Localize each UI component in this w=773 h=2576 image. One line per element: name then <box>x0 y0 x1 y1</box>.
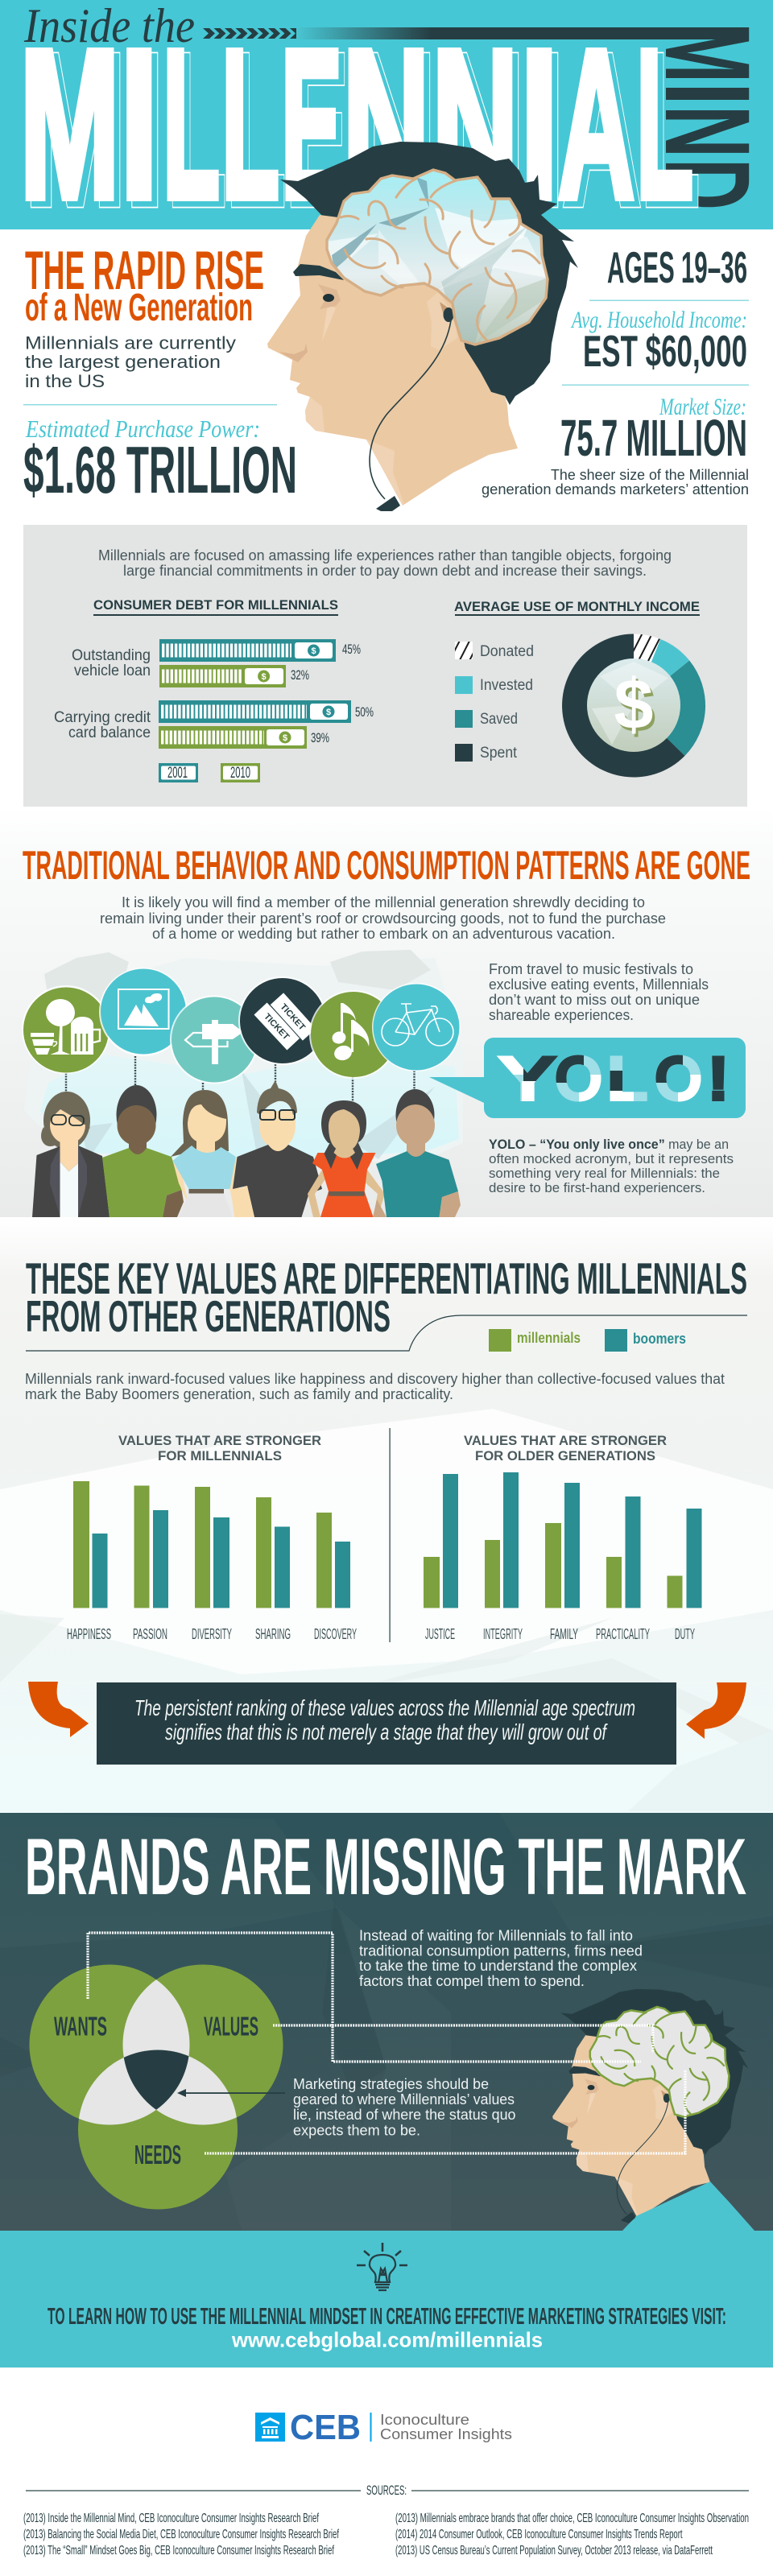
bar chart: values stronger for older generations: JUSTICE <box>425 1626 455 1642</box>
bar chart: values stronger for older generations <box>424 1472 702 1642</box>
sources left column: (2013) Balancing the Social Media Diet, CEB Iconoculture Consumer Insights Research Brief <box>23 2528 339 2541</box>
callout: YOLO speech bubble: L <box>607 1046 647 1112</box>
text: marketing strategies <box>293 2076 515 2138</box>
title outline shadow: L <box>227 11 285 248</box>
title outline shadow: N <box>348 11 435 248</box>
callout: YOLO speech bubble: L <box>607 1046 647 1112</box>
logo: CEB Iconoculture: Iconoculture <box>380 2412 469 2428</box>
icon: bicycle <box>372 983 461 1071</box>
title: MIND rotated: N <box>640 105 773 158</box>
title outline shadow: A <box>564 11 640 248</box>
legend: millennials and boomers <box>489 1329 686 1352</box>
title outline shadow: L <box>168 11 225 248</box>
bar labels: card balance <box>68 724 151 741</box>
title outline shadow: I <box>126 11 164 248</box>
stat: household income <box>571 307 747 376</box>
title: MILLENNIAL: M <box>20 6 120 242</box>
panel: title header band <box>0 0 773 248</box>
bar: vehicle loan 2010: 32% <box>291 667 309 683</box>
text: YOLO definition <box>489 1137 734 1195</box>
bar labels: Carrying credit <box>54 709 151 726</box>
callout: YOLO speech bubble: L <box>607 1046 647 1112</box>
text: largest generation: the largest generation <box>25 352 221 372</box>
title: MILLENNIAL: E <box>281 6 342 242</box>
text: marketing strategies: lie, instead of where the status quo <box>293 2107 515 2123</box>
dotted connectors <box>88 1933 685 2153</box>
text: YOLO definition: desire to be first-hand experiencers. <box>489 1180 705 1195</box>
bar chart: values stronger for millennials: SHARING <box>255 1626 291 1642</box>
callout: YOLO speech bubble <box>429 1038 746 1118</box>
callout: YOLO speech bubble: O <box>655 1046 701 1112</box>
icon: picture frame <box>99 968 188 1056</box>
arrow: left orange <box>28 1682 89 1737</box>
stat: purchase power: $1.68 TRILLION <box>23 432 297 507</box>
bar chart: values stronger for millennials: DISCOVERY <box>314 1626 357 1642</box>
heading: key values: FROM OTHER GENERATIONS <box>26 1291 391 1341</box>
legend: monthly income: Spent <box>480 745 518 762</box>
sources left column: (2013) Inside the Millennial Mind, CEB Iconoculture Consumer Insights Research Brief <box>23 2512 319 2525</box>
icon: food and drink <box>22 985 110 1074</box>
callout: YOLO speech bubble: O <box>556 1046 601 1112</box>
text: instead of waiting: Instead of waiting for Millennials to fall into <box>359 1927 633 1943</box>
stat: market size: The sheer size of the Millennial <box>551 467 749 483</box>
title outline shadow: E <box>287 11 348 248</box>
arrow: right orange <box>686 1682 746 1739</box>
person: woman in blue top <box>171 1090 242 1217</box>
bar: credit card 2010 <box>159 726 329 749</box>
bar chart: values stronger for older generations: INTEGRITY <box>483 1626 523 1642</box>
bar chart: values stronger for millennials: PASSION <box>133 1626 167 1642</box>
intro paragraph: It is likely you will find a member of the millennial generation shrewdly deciding to <box>122 894 645 910</box>
bar: credit card 2010: $ <box>283 733 287 743</box>
legend: monthly income <box>455 642 534 762</box>
shirt <box>622 2182 754 2231</box>
stat: market size <box>482 394 749 497</box>
heading: stronger for older generations <box>464 1433 667 1463</box>
title outline shadow: I <box>526 11 564 248</box>
sources left column <box>23 2512 339 2557</box>
callout: YOLO speech bubble: Y <box>501 1046 554 1112</box>
title outline shadow <box>26 11 699 248</box>
person: man in black shirt with glasses <box>231 1080 322 1217</box>
stat: purchase power: Estimated Purchase Power: <box>25 415 260 443</box>
title: MILLENNIAL: I <box>120 6 158 242</box>
callout: YOLO speech bubble: Y <box>501 1046 554 1112</box>
sources <box>23 2483 749 2557</box>
title outline shadow: M <box>26 11 126 248</box>
text: marketing strategies: Marketing strategies should be <box>293 2076 489 2092</box>
title: MILLENNIAL: A <box>558 6 635 242</box>
venn labels: WANTS <box>54 2011 107 2041</box>
person: woman in orange dress <box>308 1100 385 1217</box>
callout: YOLO speech bubble: O <box>556 1046 601 1112</box>
heading: monthly income: AVERAGE USE OF MONTHLY INCOME <box>454 599 700 614</box>
intro text <box>98 547 672 579</box>
text: YOLO definition: something very real for Millennials: the <box>489 1166 720 1181</box>
title: Inside the: Inside the <box>23 0 195 52</box>
panel: title header band: L <box>642 11 699 248</box>
text: url: www.cebglobal.com/millennials <box>231 2328 543 2352</box>
illustration: head profile with brain <box>267 142 578 511</box>
bar chart: values stronger for millennials: HAPPINESS <box>67 1626 111 1642</box>
bar labels <box>54 647 151 741</box>
icon: dollar sign: $ <box>617 667 655 747</box>
heading: consumer debt: CONSUMER DEBT FOR MILLENNIALS <box>93 597 338 613</box>
callout: YOLO speech bubble: Y <box>501 1046 554 1112</box>
icon: music notes <box>309 990 398 1079</box>
venn labels: NEEDS <box>134 2140 181 2169</box>
paragraph: inward focused values <box>25 1371 725 1402</box>
title: MILLENNIAL: I <box>520 6 559 242</box>
callout: YOLO speech bubble: O <box>655 1046 701 1112</box>
panel: title header band: L <box>642 11 699 248</box>
title outline shadow: L <box>168 11 225 248</box>
background facets <box>24 950 463 1167</box>
bar: credit card 2001: $ <box>326 708 331 717</box>
title outline shadow: N <box>438 11 523 248</box>
bar labels: Outstanding <box>72 647 151 664</box>
venn labels <box>54 2011 258 2169</box>
title outline shadow: I <box>126 11 164 248</box>
divider line left <box>23 404 277 406</box>
bar: vehicle loan 2001 <box>159 639 361 662</box>
callout: YOLO speech bubble: O <box>556 1046 601 1112</box>
callout: YOLO speech bubble: ! <box>709 1046 728 1112</box>
logo: CEB Iconoculture: CEB <box>290 2408 361 2447</box>
title: MILLENNIAL: N <box>343 6 430 242</box>
intro paragraph: remain living under their parent’s roof or crowdsourcing goods, not to fund the purchase <box>100 910 666 927</box>
background facets <box>0 1409 773 1811</box>
person: man in green shirt <box>102 1085 184 1217</box>
title outline shadow: A <box>564 11 640 248</box>
callout: persistent ranking <box>97 1682 676 1765</box>
headline: the rapid rise <box>25 240 264 329</box>
title: MIND rotated: I <box>640 82 773 105</box>
paragraph: inward focused values: Millennials rank inward-focused values like happiness and discovery higher than collective-focused values that <box>25 1371 725 1387</box>
illustration: small head with brain <box>552 1989 754 2231</box>
bar: vehicle loan 2001: 45% <box>342 642 361 657</box>
title: MILLENNIAL: N <box>432 6 519 242</box>
bar: credit card 2001 <box>159 700 374 723</box>
venn diagram <box>29 1964 283 2209</box>
intro text: Millennials are focused on amassing life experiences rather than tangible objects, forgoing <box>98 547 672 564</box>
heading: stronger for older generations: VALUES THAT ARE STRONGER <box>464 1433 667 1448</box>
heading: stronger for older generations: FOR OLDER GENERATIONS <box>475 1448 655 1463</box>
title: MIND rotated: D <box>640 159 773 210</box>
icon: dollar sign: $ <box>614 664 653 744</box>
bar labels: vehicle loan <box>74 663 151 679</box>
text: largest generation: in the US <box>25 371 105 391</box>
icon: signpost <box>170 995 258 1084</box>
legend: monthly income: Saved <box>480 711 518 728</box>
person: woman with glasses and blazer <box>32 1092 110 1217</box>
logo: CEB Iconoculture <box>255 2408 512 2447</box>
intro paragraph <box>100 894 666 942</box>
text: largest generation: Millennials are currently <box>25 333 236 353</box>
stat: market size: generation demands marketers’ attention <box>482 481 749 497</box>
title outline shadow: E <box>287 11 348 248</box>
callout: YOLO speech bubble: O <box>655 1046 701 1112</box>
divider line right 2 <box>562 385 749 386</box>
text: shareable experiences: don’t want to miss out on unique <box>489 992 700 1008</box>
heading: key values <box>26 1253 747 1341</box>
title: MILLENNIAL: L <box>221 6 279 242</box>
legend: 2010 <box>221 763 260 782</box>
icon: tickets <box>238 976 327 1065</box>
legend: millennials and boomers: boomers <box>633 1331 686 1347</box>
bar: credit card 2001: 50% <box>355 704 374 720</box>
text: instead of waiting: factors that compel them to spend. <box>359 1973 585 1989</box>
text: shareable experiences: shareable experiences. <box>489 1007 634 1023</box>
text: shareable experiences <box>489 961 709 1023</box>
panel: brands missing the mark <box>0 1813 773 2231</box>
icon: light bulb <box>357 2243 407 2290</box>
callout: YOLO speech bubble: ! <box>709 1046 728 1112</box>
intro text: large financial commitments in order to pay down debt and increase their savings. <box>123 563 647 579</box>
text: YOLO definition: often mocked acronym, but it represents <box>489 1151 734 1166</box>
intro paragraph: of a home or wedding but rather to embark on an adventurous vacation. <box>152 926 615 942</box>
logo: CEB Iconoculture: Consumer Insights <box>380 2426 512 2442</box>
panel: title header band: L <box>636 6 693 242</box>
text: marketing strategies: geared to where Millennials’ values <box>293 2091 515 2107</box>
text: instead of waiting <box>359 1927 643 1989</box>
dotted connectors <box>66 1056 414 1103</box>
sources: SOURCES: <box>366 2483 407 2498</box>
legend: millennials and boomers: millennials <box>517 1330 581 1346</box>
bar: vehicle loan 2001: $ <box>311 646 316 656</box>
headline: the rapid rise: THE RAPID RISE <box>25 240 264 301</box>
background facets <box>0 1813 773 2231</box>
legend: 2010: 2010 <box>230 765 250 782</box>
callout: YOLO speech bubble: ! <box>709 1046 728 1112</box>
text: instead of waiting: to take the time to understand the complex <box>359 1958 637 1974</box>
panel: call to action band <box>0 2231 773 2368</box>
bar chart: values stronger for older generations: PRACTICALITY <box>596 1626 650 1642</box>
icon: tickets: TICKET <box>262 1012 291 1042</box>
text: marketing strategies: expects them to be. <box>293 2122 420 2138</box>
panel: key values section <box>0 1217 773 1813</box>
title outline shadow: N <box>438 11 523 248</box>
heading: stronger for millennials <box>118 1433 321 1463</box>
text: shareable experiences: exclusive eating events, Millennials <box>489 976 709 993</box>
paragraph: inward focused values: mark the Baby Boomers generation, such as family and practicality. <box>25 1386 453 1402</box>
panel: consumer debt and income <box>23 525 747 807</box>
title outline shadow: L <box>227 11 285 248</box>
title: MILLENNIAL: L <box>163 6 220 242</box>
bar: vehicle loan 2010 <box>159 665 309 687</box>
bar chart: values stronger for older generations: DUTY <box>675 1626 695 1642</box>
headline: the rapid rise: of a New Generation <box>25 287 253 329</box>
legend: monthly income: Donated <box>480 643 534 660</box>
icon: tickets: TICKET <box>278 1002 307 1033</box>
text: instead of waiting: traditional consumption patterns, firms need <box>359 1943 643 1959</box>
heading: stronger for millennials: FOR MILLENNIALS <box>158 1448 282 1463</box>
bar chart: values stronger for millennials <box>67 1481 357 1642</box>
gradient bar into MIND <box>296 27 749 39</box>
text: YOLO definition: YOLO – “You only live once” may be an <box>489 1137 729 1152</box>
arrow: to venn center <box>177 2089 285 2097</box>
bar: vehicle loan 2010: $ <box>262 672 267 682</box>
venn labels: VALUES <box>204 2011 258 2041</box>
brain <box>327 170 548 345</box>
legend: 2001 <box>159 763 198 782</box>
person: man in teal shirt <box>373 1089 461 1217</box>
panel: traditional behavior section <box>0 851 773 1217</box>
icon: chevron arrows <box>203 28 302 39</box>
bar chart: consumer debt <box>54 639 374 782</box>
title: MIND rotated: M <box>640 23 773 83</box>
sources right column <box>395 2512 749 2557</box>
sources left column: (2013) The “Small” Mindset Goes Big, CEB Iconoculture Consumer Insights Research Brief <box>23 2544 334 2557</box>
text: shareable experiences: From travel to music festivals to <box>489 961 693 977</box>
text: largest generation <box>25 333 236 391</box>
title outline shadow: M <box>26 11 126 248</box>
legend: monthly income: Invested <box>480 677 533 694</box>
divider line right 1 <box>589 299 749 301</box>
bar chart: values stronger for older generations: FAMILY <box>550 1626 578 1642</box>
legend: 2001: 2001 <box>167 765 188 782</box>
bar chart: values stronger for millennials: DIVERSITY <box>192 1626 232 1642</box>
heading: stronger for millennials: VALUES THAT ARE STRONGER <box>118 1433 321 1448</box>
donut chart: monthly income <box>562 634 705 778</box>
bar: credit card 2010: 39% <box>311 730 329 745</box>
title outline shadow: I <box>526 11 564 248</box>
title outline shadow: N <box>348 11 435 248</box>
stat: purchase power <box>23 415 297 507</box>
